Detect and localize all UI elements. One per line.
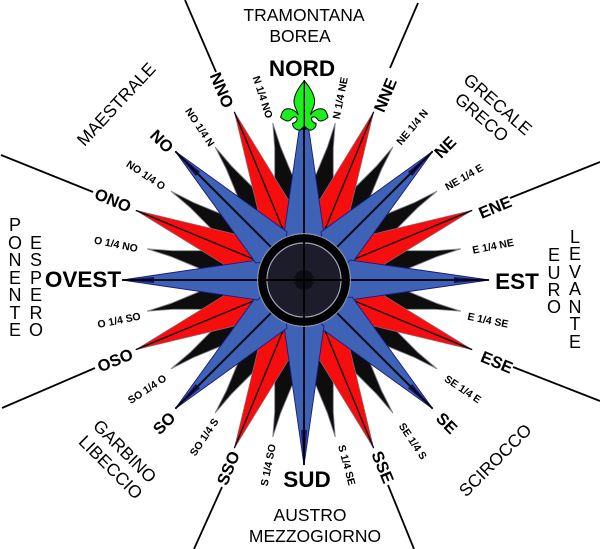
vertical wind name: LEVANTE: A: [569, 279, 581, 299]
intercardinal labels: ESE: [478, 348, 515, 378]
intercardinal labels: ENE: [476, 193, 514, 223]
wind names: northeast: GRECALE: [460, 69, 536, 139]
vertical wind name: EURO: R: [548, 280, 560, 300]
quarter-wind labels: NO 1/4 O: [124, 158, 167, 193]
wind names: south: AUSTRO: [274, 505, 346, 525]
quarter-wind labels: E 1/4 NE: [471, 237, 515, 257]
wind name: MAESTRALE: MAESTRALE: [73, 59, 160, 150]
vertical wind name: EURO: O: [547, 297, 561, 317]
vertical wind name: LEVANTE: T: [570, 314, 580, 334]
quarter-wind labels: NE 1/4 N: [394, 107, 431, 148]
quarter-wind labels: SE 1/4 E: [442, 373, 483, 406]
quarter-wind labels: O 1/4 SO: [97, 311, 142, 331]
wind names: southwest: GARBINO: [89, 416, 160, 487]
quarter-wind labels: S 1/4 SO: [259, 443, 279, 487]
vertical wind name: LEVANTE: N: [568, 297, 582, 317]
vertical wind name: LEVANTE: L: [570, 227, 580, 247]
intercardinal labels: SSO: [214, 449, 244, 488]
vertical wind name: EURO: U: [548, 263, 560, 283]
vertical wind name: ESPERO: S: [30, 250, 42, 270]
vertical wind name: PONENTE: E: [9, 268, 21, 288]
vertical wind name: PONENTE: O: [8, 233, 22, 253]
cardinal label: NORD: NORD: [269, 56, 335, 81]
vertical wind name: EURO: E: [548, 245, 560, 265]
quarter-wind labels: SE 1/4 S: [396, 421, 429, 462]
vertical wind name: ESPERO: E: [30, 285, 42, 305]
cardinal label: EST: EST: [495, 269, 539, 294]
wind names: north: BOREA: [269, 26, 331, 46]
vertical wind name: ESPERO: R: [30, 303, 42, 323]
vertical wind name: ESPERO: P: [30, 268, 42, 288]
intercardinal labels: NNO: [206, 70, 237, 111]
icon: green fleur-de-lis north marker: [281, 80, 328, 133]
vertical wind name: PONENTE: T: [10, 303, 20, 323]
intercardinal labels: NNE: [371, 76, 401, 115]
quarter-wind labels: N 1/4 NE: [331, 76, 351, 120]
quarter-wind labels: E 1/4 SE: [466, 311, 509, 331]
red half-wind points: [128, 104, 480, 456]
wind names: north: [243, 5, 365, 46]
vertical wind name: LEVANTE: E: [569, 332, 581, 352]
quarter-wind labels: NE 1/4 E: [443, 162, 486, 193]
vertical wind name: PONENTE: P: [9, 215, 21, 235]
intercardinal labels: [92, 70, 515, 488]
wind names: northeast: GRECO: [451, 89, 513, 146]
intercardinal labels: ONO: [92, 185, 134, 216]
quarter-wind labels: S 1/4 SE: [335, 444, 357, 487]
vertical wind name: PONENTE: N: [8, 285, 22, 305]
quarter-wind labels: N 1/4 NO: [250, 75, 275, 120]
vertical wind name: ESPERO: O: [29, 320, 43, 340]
quarter-wind labels: SO 1/4 O: [126, 372, 169, 407]
vertical wind name: PONENTE: [8, 215, 22, 340]
black quarter-wind points: [144, 120, 464, 440]
wind names: south: [249, 505, 381, 546]
wind name: SCIROCCO: SCIROCCO: [455, 420, 536, 501]
wind names: north: TRAMONTANA: [243, 5, 365, 25]
vertical wind name: PONENTE: N: [8, 250, 22, 270]
quarter-wind labels: [93, 75, 515, 487]
vertical wind name: PONENTE: E: [9, 320, 21, 340]
wind names: south: MEZZOGIORNO: [249, 526, 381, 546]
intercardinal labels: SO: [150, 409, 180, 438]
vertical wind name: ESPERO: [29, 233, 43, 340]
vertical wind name: ESPERO: E: [30, 233, 42, 253]
intercardinal labels: NE: [431, 133, 460, 162]
intercardinal labels: OSO: [95, 345, 136, 376]
intercardinal labels: SSE: [367, 449, 397, 486]
wind names: southwest: [75, 416, 160, 503]
quarter-wind labels: NO 1/4 N: [182, 106, 216, 149]
quarter-wind labels: SO 1/4 S: [188, 416, 221, 458]
cardinal label: SUD: SUD: [283, 467, 331, 492]
blue principal points: [122, 96, 489, 465]
cardinal label: OVEST: OVEST: [45, 267, 121, 292]
compass rose star: [122, 96, 489, 465]
quarter-wind labels: O 1/4 NO: [93, 235, 139, 255]
intercardinal labels: SE: [432, 410, 460, 438]
vertical wind name: EURO: [547, 245, 561, 317]
central hub: [257, 233, 351, 327]
intercardinal labels: NO: [146, 127, 177, 157]
vertical wind name: LEVANTE: E: [569, 244, 581, 264]
wind names: southwest: LIBECCIO: [75, 431, 147, 503]
vertical wind name: LEVANTE: V: [569, 262, 581, 282]
vertical wind name: LEVANTE: [568, 227, 582, 352]
